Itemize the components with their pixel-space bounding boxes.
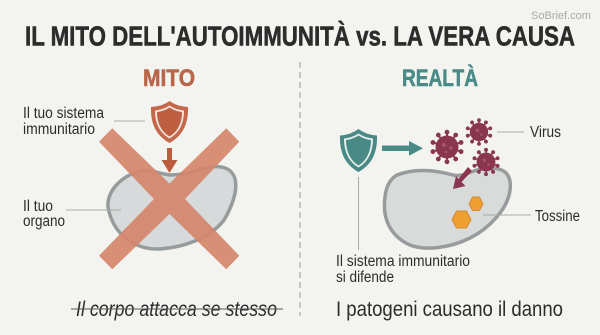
label: immune system defends — [336, 253, 470, 286]
virus on organ — [472, 148, 500, 176]
icon: teal shield — [340, 129, 377, 172]
line: shield to label — [358, 177, 360, 250]
arrow: shield to viruses — [382, 141, 423, 156]
panel: reality — [336, 64, 580, 321]
arrow: virus into organ — [453, 167, 472, 189]
label: your organ — [23, 198, 121, 230]
organ with toxins — [384, 168, 510, 248]
heading: REALTÀ: REALTÀ — [402, 64, 478, 92]
toxin hexagons — [452, 197, 483, 228]
red cross — [99, 128, 239, 269]
heading: MITO: MITO — [143, 65, 195, 92]
virus top — [465, 118, 493, 146]
label: your immune system: immunitario — [23, 121, 95, 138]
panel: myth — [23, 65, 283, 321]
caption: myth: Il corpo attacca se stesso — [76, 298, 277, 321]
label: toxins: Tossine — [535, 208, 580, 225]
label: immune system defends: Il sistema immunitario — [336, 253, 470, 270]
caption: reality: I patogeni causano il danno — [336, 298, 563, 321]
label: virus — [497, 124, 561, 141]
watermark: SoBrief.com — [531, 10, 591, 22]
icon: red shield — [151, 101, 188, 143]
label: your organ: organo — [23, 213, 65, 230]
label: toxins — [483, 208, 580, 225]
label: your organ: Il tuo — [23, 198, 53, 215]
label: virus: Virus — [530, 124, 561, 141]
organ — [108, 167, 236, 249]
arrow: shield to organ — [162, 148, 178, 173]
label: immune system defends: si difende — [336, 269, 394, 286]
virus large — [430, 130, 464, 164]
label: your immune system: Il tuo sistema — [23, 105, 104, 122]
label: your immune system — [23, 105, 145, 138]
